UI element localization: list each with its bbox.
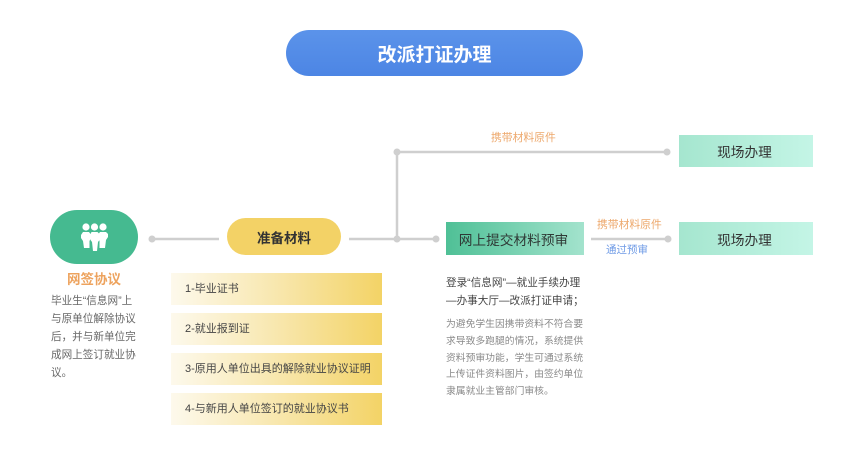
text: pre-review note [446, 318, 583, 397]
title: 改派打证办理 [377, 44, 492, 66]
text: online signing description: 议。 [51, 367, 72, 379]
text: online signing description: 后，并与新单位完 [51, 331, 136, 343]
label: carry originals top: 携带材料原件 [491, 132, 556, 144]
text: online steps: —办事大厅—改派打证申请； [446, 295, 584, 307]
text: pre-review note: 资料预审功能，学生可通过系统 [446, 353, 583, 364]
text: online steps: 登录“信息网”—就业手续办理 [446, 277, 580, 289]
item 4 [171, 393, 382, 425]
text: pre-review note: 隶属就业主管部门审核。 [446, 386, 554, 397]
icon: three people [50, 210, 138, 264]
box: on-site bottom: 现场办理 [717, 232, 772, 248]
item 3: 3-原用人单位出具的解除就业协议证明 [185, 363, 371, 375]
item 3 [171, 353, 382, 385]
item 4: 4-与新用人单位签订的就业协议书 [185, 403, 349, 415]
title [286, 30, 583, 76]
text: online signing description: 毕业生“信息网”上 [51, 295, 132, 307]
item 2 [171, 313, 382, 345]
text: pre-review note: 为避免学生因携带资料不符合要 [446, 319, 583, 330]
heading: prepare materials [227, 218, 341, 255]
text: online steps [446, 276, 584, 307]
heading: prepare materials: 准备材料 [257, 230, 311, 246]
panel: online signing [50, 210, 138, 379]
heading: online signing: 网签协议 [67, 272, 121, 287]
list: materials [171, 273, 382, 425]
label: passed review: 通过预审 [606, 244, 648, 256]
item 1: 1-毕业证书 [185, 283, 239, 295]
text: online signing description: 与原单位解除协议 [51, 313, 136, 325]
item 1 [171, 273, 382, 305]
text: online signing description [51, 294, 136, 379]
label: carry originals bottom: 携带材料原件 [597, 219, 662, 231]
box: on-site top: 现场办理 [717, 145, 772, 160]
text: pre-review note: 求导致多跑腿的情况，系统提供 [446, 336, 583, 347]
box: on-site bottom [679, 222, 813, 255]
text: online signing description: 成网上签订就业协 [51, 349, 136, 361]
box: online pre-review [446, 222, 584, 255]
box: on-site top [679, 135, 813, 167]
box: online pre-review: 网上提交材料预审 [459, 232, 568, 248]
text: pre-review note: 上传证件资料图片，由签约单位 [446, 369, 583, 380]
item 2: 2-就业报到证 [185, 323, 250, 335]
